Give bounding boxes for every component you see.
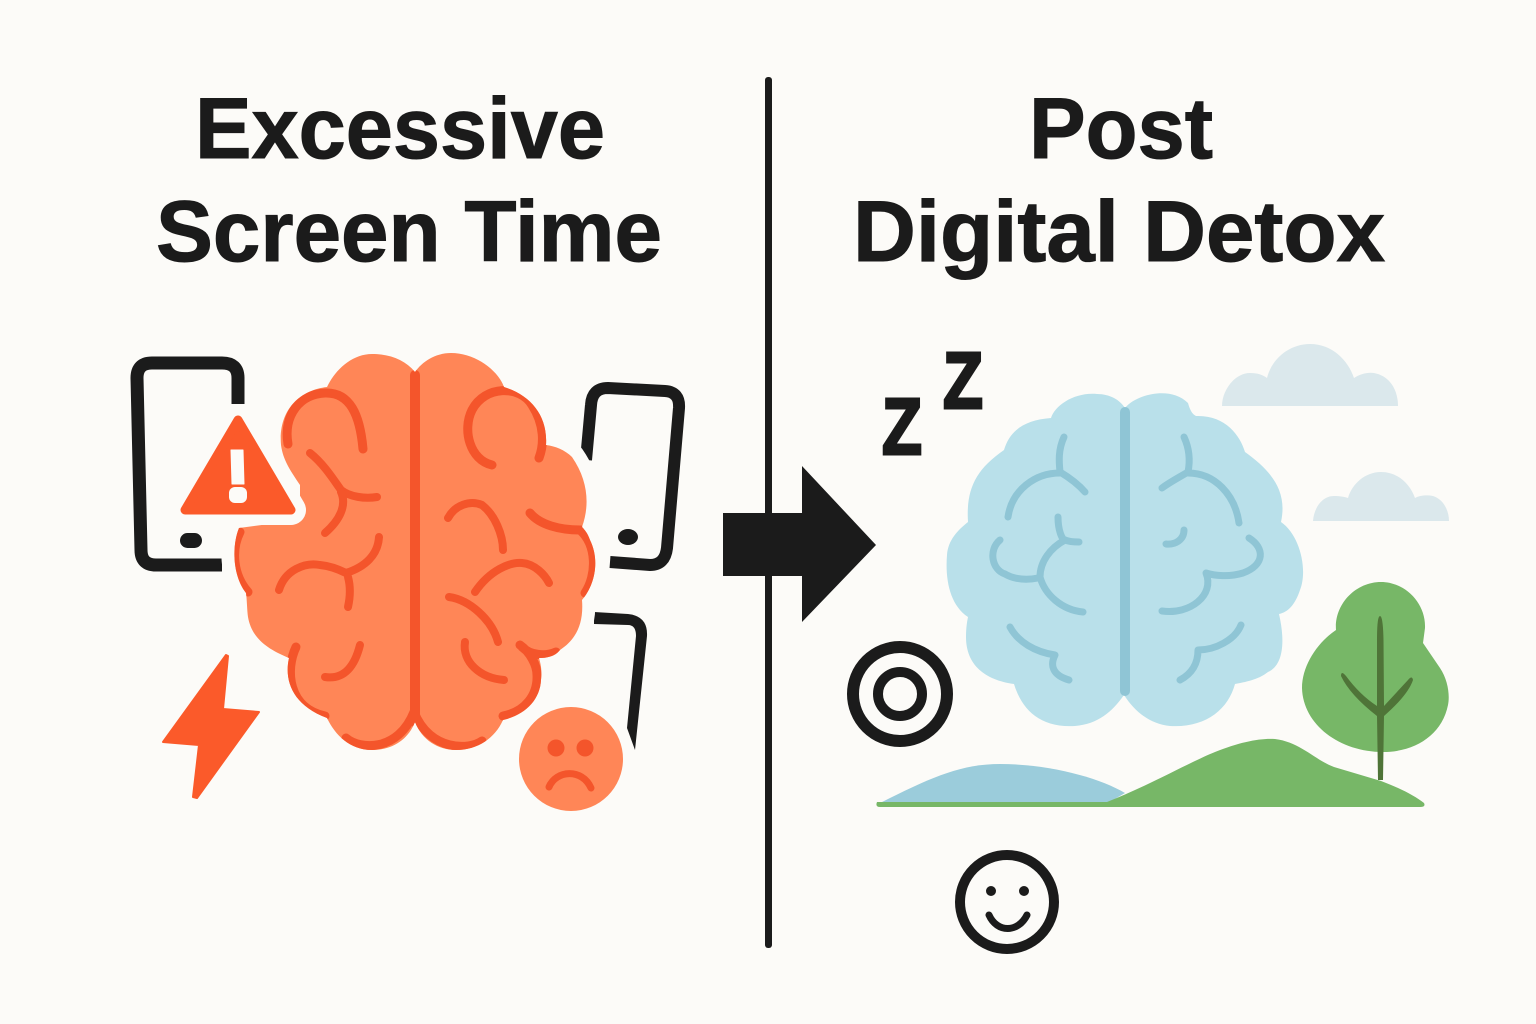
icon: target <box>853 647 947 741</box>
icon: phone lower right <box>594 612 647 750</box>
icon: cloud small <box>1313 472 1449 521</box>
icon: smiley face <box>960 855 1054 949</box>
title: post digital detox: Digital Detox <box>853 184 1385 280</box>
icon: sad face <box>519 707 623 811</box>
brain: stressed <box>234 353 595 750</box>
title: post digital detox: Post <box>1029 81 1213 177</box>
icon: warning triangle <box>185 420 291 510</box>
arrow <box>723 466 876 622</box>
title: excessive screen time: Excessive <box>195 81 605 177</box>
brain: calm <box>947 393 1303 726</box>
center divider <box>765 77 772 948</box>
icon: lightning bolt <box>163 655 259 798</box>
illustration: water hill <box>880 764 1125 803</box>
icon: zzz <box>882 336 983 471</box>
illustration: tree <box>1302 582 1449 780</box>
illustration: green hill <box>876 739 1424 807</box>
title: excessive screen time: Screen Time <box>156 184 662 280</box>
icon: zzz: Z <box>882 382 922 471</box>
icon: zzz: Z <box>943 336 983 425</box>
icon: phone left <box>137 363 238 565</box>
title: post digital detox <box>853 81 1385 280</box>
title: excessive screen time <box>156 81 662 280</box>
icon: cloud large <box>1222 344 1398 406</box>
icon: phone right <box>586 388 679 565</box>
